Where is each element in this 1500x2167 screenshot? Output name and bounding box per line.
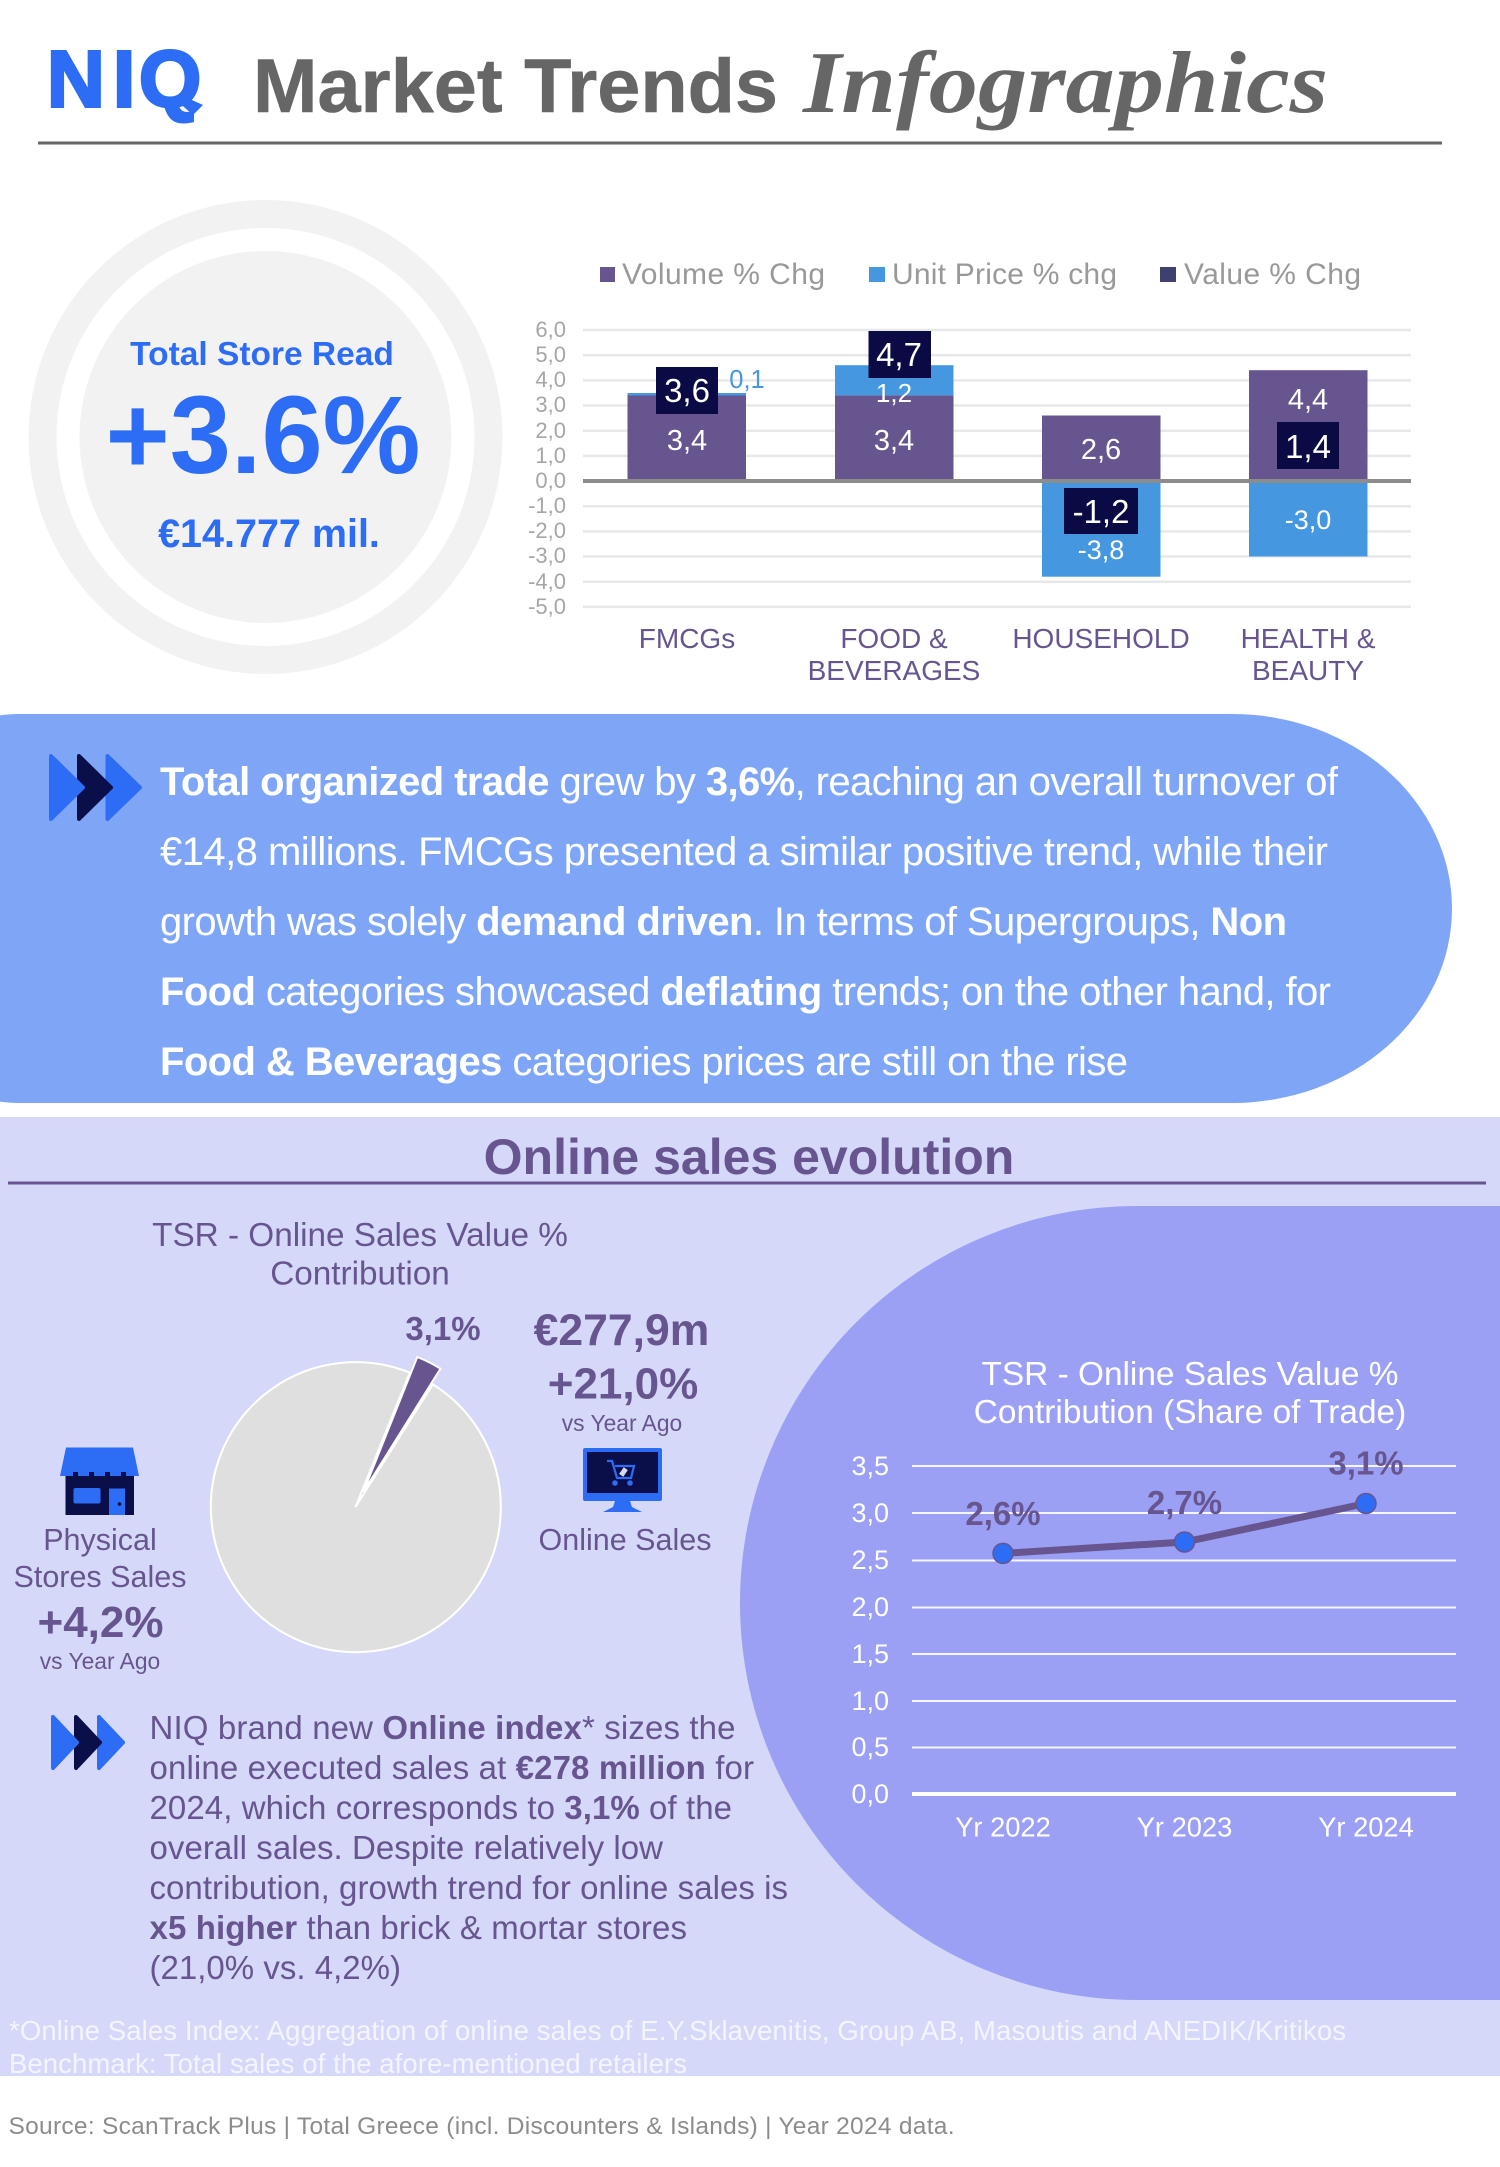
physical stores figures: Stores Sales [14,1560,186,1594]
panel: total organized trade summary [0,714,1452,1103]
online sales figures: €277,9m [534,1306,709,1355]
chart category labels: BEAUTY [1252,655,1364,686]
chart gridlines and axis: 2,0 [535,418,566,443]
bars: Household [1042,416,1160,577]
title: Market Trends [253,44,778,129]
stacked bar chart [528,258,1411,686]
chart category labels: BEVERAGES [808,655,980,686]
pie chart [211,1310,501,1652]
line chart gridlines and axis: 0,5 [851,1732,889,1762]
header [38,34,1442,144]
line series with data points: 2,6% [965,1495,1041,1532]
chart gridlines and axis: 6,0 [535,317,566,342]
chart legend: Volume % Chg [622,258,825,291]
footnote: Benchmark: Total sales of the afore-mentioned retailers [9,2048,687,2079]
summary text: €14,8 millions. FMCGs presented a similar positive trend, while their [160,830,1328,874]
summary text [160,760,1339,1084]
chart gridlines and axis [528,317,1411,619]
pie chart title [152,1217,568,1292]
summary text: growth was solely demand driven. In terms of Supergroups, Non [160,900,1287,944]
pie chart title: Contribution [270,1256,450,1292]
bars: Household: -3,8 [1078,535,1124,565]
online index text: 2024, which corresponds to 3,1% of the [150,1789,732,1826]
icon: online shop monitor [583,1448,662,1512]
bars: Food & Beverages: 3,4 [874,425,914,457]
panel: total store read [28,200,502,674]
online sales figures: vs Year Ago [562,1410,682,1436]
online index text: (21,0% vs. 4,2%) [150,1949,401,1986]
bars: Health & Beauty: 1,4 [1285,428,1331,465]
line chart gridlines and axis: 1,5 [851,1639,889,1669]
online sales label: Online Sales [539,1523,711,1557]
chart gridlines and axis: -3,0 [528,543,566,568]
bars: Health & Beauty: 4,4 [1288,384,1328,416]
chart gridlines and axis: -2,0 [528,518,566,543]
summary text: Food categories showcased deflating trends; on the other hand, for [160,970,1331,1014]
line series with data points: 2,7% [1147,1484,1222,1521]
bars: FMCGs: 3,4 [667,425,707,457]
line series with data points [965,1444,1404,1563]
line chart gridlines and axis [851,1451,1456,1842]
title [253,35,1328,132]
chart legend: Value % Chg [1184,258,1361,291]
chart category labels: FOOD & [840,623,948,654]
footnote [9,2015,1346,2079]
icon: triple arrows small [53,1717,123,1768]
panel: line chart background [740,1206,1500,2000]
summary text: Food & Beverages categories prices are still on the rise [160,1040,1128,1084]
chart gridlines and axis: 4,0 [535,367,566,392]
line chart gridlines and axis: Yr 2023 [1137,1812,1232,1842]
chart category labels: HOUSEHOLD [1012,623,1190,654]
physical stores figures: Physical [43,1523,157,1557]
bars: Household: 2,6 [1081,434,1121,466]
pie chart title: TSR - Online Sales Value % [152,1217,568,1254]
chart gridlines and axis: -5,0 [528,594,566,619]
line chart gridlines and axis: 3,5 [851,1451,889,1481]
pie chart: 3,1% [405,1310,481,1347]
chart category labels [639,623,1376,686]
icon: triple arrows [51,756,140,819]
bars: FMCGs: 3,6 [664,372,710,409]
line chart title [974,1356,1406,1431]
chart gridlines and axis: -1,0 [528,493,566,518]
line series with data points: 3,1% [1328,1444,1404,1482]
online sales figures: +21,0% [548,1360,698,1408]
line chart gridlines and axis: 1,0 [851,1686,889,1716]
bars: Food & Beverages: 1,2 [876,378,912,408]
chart category labels: HEALTH & [1241,623,1376,654]
chart legend [600,258,1361,291]
bars: Health & Beauty [1249,370,1368,556]
panel: total store read: +3.6% [106,374,420,497]
footnote: *Online Sales Index: Aggregation of online sales of E.Y.Sklavenitis, Group AB, Masoutis and ANEDIK/Kritikos [9,2015,1346,2046]
chart category labels: FMCGs [639,623,735,654]
online index text: x5 higher than brick & mortar stores [150,1909,687,1946]
online index text: contribution, growth trend for online sales is [150,1869,788,1906]
panel: total store read: Total Store Read [130,336,394,373]
physical stores figures: vs Year Ago [40,1648,160,1674]
online sales figures [534,1306,709,1436]
line chart title: TSR - Online Sales Value % [982,1356,1398,1393]
line chart gridlines and axis: 2,0 [851,1592,889,1622]
line chart title: Contribution (Share of Trade) [974,1394,1406,1431]
chart gridlines and axis: -4,0 [528,569,566,594]
online index text: online executed sales at €278 million for [150,1749,754,1786]
title: Infographics [802,35,1328,132]
logo: NIQ: NIQ [47,34,201,124]
line chart gridlines and axis: 3,0 [851,1498,889,1528]
physical stores figures [14,1523,186,1674]
source note: Source: ScanTrack Plus | Total Greece (incl. Discounters & Islands) | Year 2024 data. [8,2113,954,2140]
chart gridlines and axis: 3,0 [535,392,566,417]
bars: Food & Beverages: 4,7 [876,336,922,373]
online index text: overall sales. Despite relatively low [150,1829,663,1866]
physical stores figures: +4,2% [38,1598,163,1647]
bars: Household: -1,2 [1073,493,1129,530]
chart gridlines and axis: 5,0 [535,342,566,367]
chart gridlines and axis: 0,0 [535,468,566,493]
heading [8,1129,1486,1185]
line chart gridlines and axis: Yr 2024 [1318,1812,1414,1842]
online index text [150,1709,788,1986]
bars: Food & Beverages [835,331,954,481]
bars: FMCGs [628,366,765,481]
chart gridlines and axis: 1,0 [535,443,566,468]
line chart gridlines and axis: 0,0 [851,1779,889,1809]
bars: Health & Beauty: -3,0 [1285,505,1331,535]
icon: physical store [60,1448,139,1515]
online index text: NIQ brand new Online index* sizes the [150,1709,736,1746]
heading: Online sales evolution [484,1129,1014,1185]
line chart gridlines and axis: 2,5 [851,1545,889,1575]
panel: total store read: €14.777 mil. [158,512,380,556]
summary text: Total organized trade grew by 3,6%, reaching an overall turnover of [160,760,1339,804]
bars: FMCGs: 0,1 [729,366,765,394]
chart legend: Unit Price % chg [892,258,1117,291]
panel: online sales evolution [0,1117,1500,2079]
line chart gridlines and axis: Yr 2022 [955,1812,1051,1842]
